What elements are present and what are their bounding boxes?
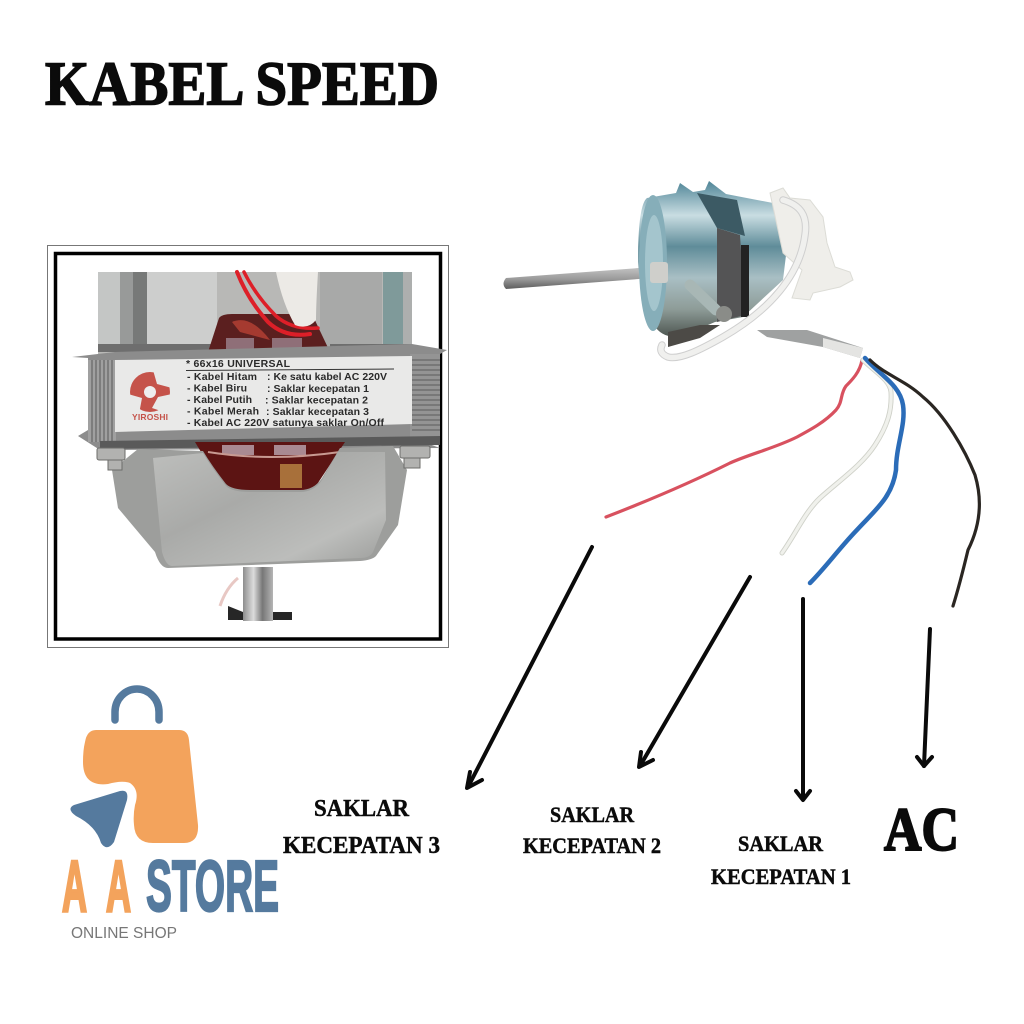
stator lamination band [72,344,447,450]
arrow: white wire to switch 2 [639,577,750,767]
yiroshi logo: YIROSHI [132,412,168,422]
title: KABEL SPEED [45,50,439,118]
motor body [638,181,787,347]
label: saklar kecepatan 2: SAKLAR [550,802,635,827]
lower coil [195,442,345,492]
icon: location arrow [70,791,127,847]
motor top bracket [98,272,412,354]
label: saklar kecepatan 3: SAKLAR [314,796,410,822]
specification text: - Kabel Merah [187,406,259,418]
specification text [186,358,394,429]
shaft [504,267,652,289]
arrow: red wire to switch 3 [467,547,592,788]
logo wordmark: A [62,847,87,927]
red wire [606,360,862,517]
label: saklar kecepatan 1: KECEPATAN 1 [711,864,851,889]
white cable loop [661,200,806,358]
lower bracket cup [112,446,407,568]
specification text: : Saklar kecepatan 3 [266,406,369,418]
logo wordmark: A [106,847,131,927]
red wires [237,272,318,335]
panel: fan motor photo [504,181,979,606]
label: saklar kecepatan 2: KECEPATAN 2 [523,833,661,858]
white gearbox [770,188,853,300]
bolts [97,446,430,470]
specification text: * 66x16 UNIVERSAL [186,358,291,370]
yiroshi logo [128,370,172,422]
logo: A A Store [62,689,279,942]
specification text: - Kabel AC 220V satunya saklar On/Off [187,417,384,429]
flat grey cable [757,330,863,358]
label: saklar kecepatan 3: KECEPATAN 3 [283,833,440,859]
specification text: : Saklar kecepatan 2 [265,394,368,406]
specification text: - Kabel Biru [187,382,247,394]
motor shaft [220,567,292,621]
black wire [870,360,979,606]
icon: shopping bag [83,730,198,843]
arrow: blue wire to switch 1 [796,599,810,800]
logo tagline: ONLINE SHOP [71,925,177,942]
blue wire [810,358,904,583]
specification text: : Saklar kecepatan 1 [267,383,369,395]
coil opening with copper winding [208,314,330,354]
icon: shopping bag handle [115,689,159,720]
label sticker [115,356,412,432]
label: saklar kecepatan 1: SAKLAR [738,831,824,856]
specification text: : Ke satu kabel AC 220V [267,371,387,383]
label: saklar kecepatan 2 [523,802,661,858]
logo wordmark: STORE [146,847,279,927]
arrow: black wire to AC [917,629,932,766]
panel: motor label photo [48,246,448,648]
label: saklar kecepatan 1 [711,831,851,889]
white wire [782,360,891,553]
logo wordmark [62,847,279,927]
label: AC: AC [884,797,959,864]
white sleeved cable [276,272,318,327]
label: saklar kecepatan 3 [283,796,440,859]
specification text: - Kabel Hitam [187,371,257,383]
specification text: - Kabel Putih [187,394,252,406]
